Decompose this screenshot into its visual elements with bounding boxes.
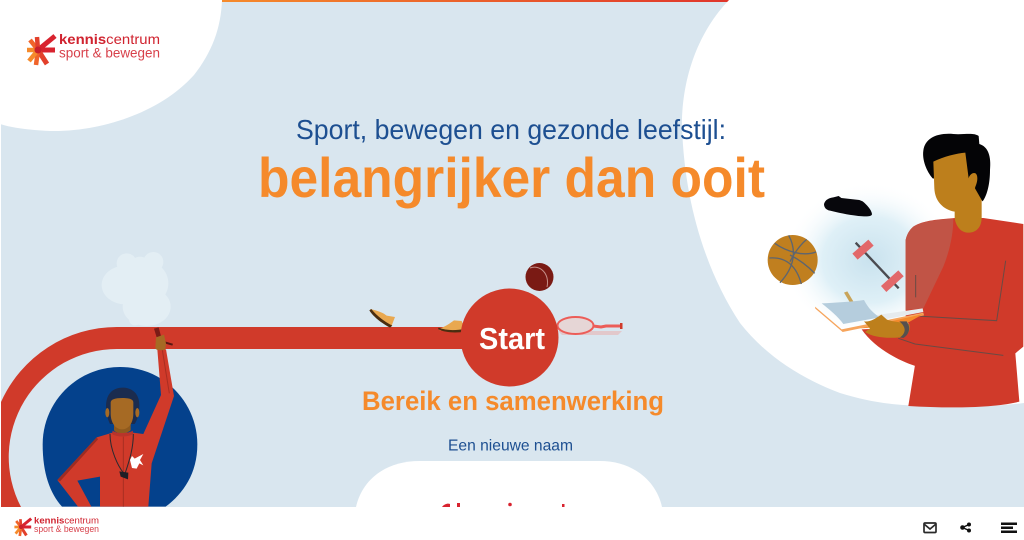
title: intro line: Sport, bewegen en gezonde leefstijl: bbox=[296, 114, 726, 145]
icon: menu bbox=[1001, 522, 1017, 533]
logo: top bbox=[27, 31, 160, 65]
figure: hand and sleeve bbox=[864, 315, 910, 338]
smoke cloud bbox=[102, 252, 171, 326]
figure: man body bbox=[862, 134, 1023, 407]
track bbox=[1, 327, 480, 507]
icon: mail bbox=[924, 523, 936, 532]
subheading: Een nieuwe naam bbox=[448, 438, 573, 454]
footer logo: kenniscentrum bbox=[34, 516, 99, 526]
footer logo: sport & bewegen bbox=[34, 524, 99, 534]
logo: top: kenniscentrum bbox=[59, 31, 160, 47]
icon: shoe on track bbox=[438, 320, 465, 332]
top progress line bbox=[222, 0, 732, 2]
section heading: Bereik en samenwerking bbox=[362, 386, 664, 416]
footer bar bbox=[0, 507, 1024, 540]
white rounded panel, cut off by footer bbox=[356, 461, 662, 507]
white shape: top left bbox=[0, 0, 222, 131]
icon: running shoe bbox=[824, 196, 872, 216]
icons: shoes in the air and on track bbox=[369, 309, 465, 332]
illustration: man with book and floating sports items bbox=[768, 134, 1023, 407]
glow above the book bbox=[783, 182, 957, 338]
icon: tennis racket bbox=[558, 317, 622, 335]
figure: coach bbox=[57, 327, 174, 507]
icon: shoe in the air bbox=[369, 309, 395, 328]
start button: Start bbox=[479, 321, 545, 356]
title: main heading: belangrijker dan ooit bbox=[258, 146, 765, 209]
icon: open book with pencil bbox=[815, 291, 924, 332]
logo: top: sport & bewegen bbox=[59, 46, 160, 60]
white shape: right bbox=[682, 0, 1024, 407]
illustration: coach with starting pistol bbox=[43, 252, 197, 507]
start button bbox=[460, 288, 558, 386]
footer logo bbox=[14, 516, 99, 536]
icon: share bbox=[961, 523, 970, 532]
icon: dumbbell bbox=[855, 243, 901, 289]
icon: basketball bbox=[768, 235, 818, 285]
blue circle bbox=[43, 367, 197, 507]
icon: tennis ball bbox=[526, 263, 554, 291]
